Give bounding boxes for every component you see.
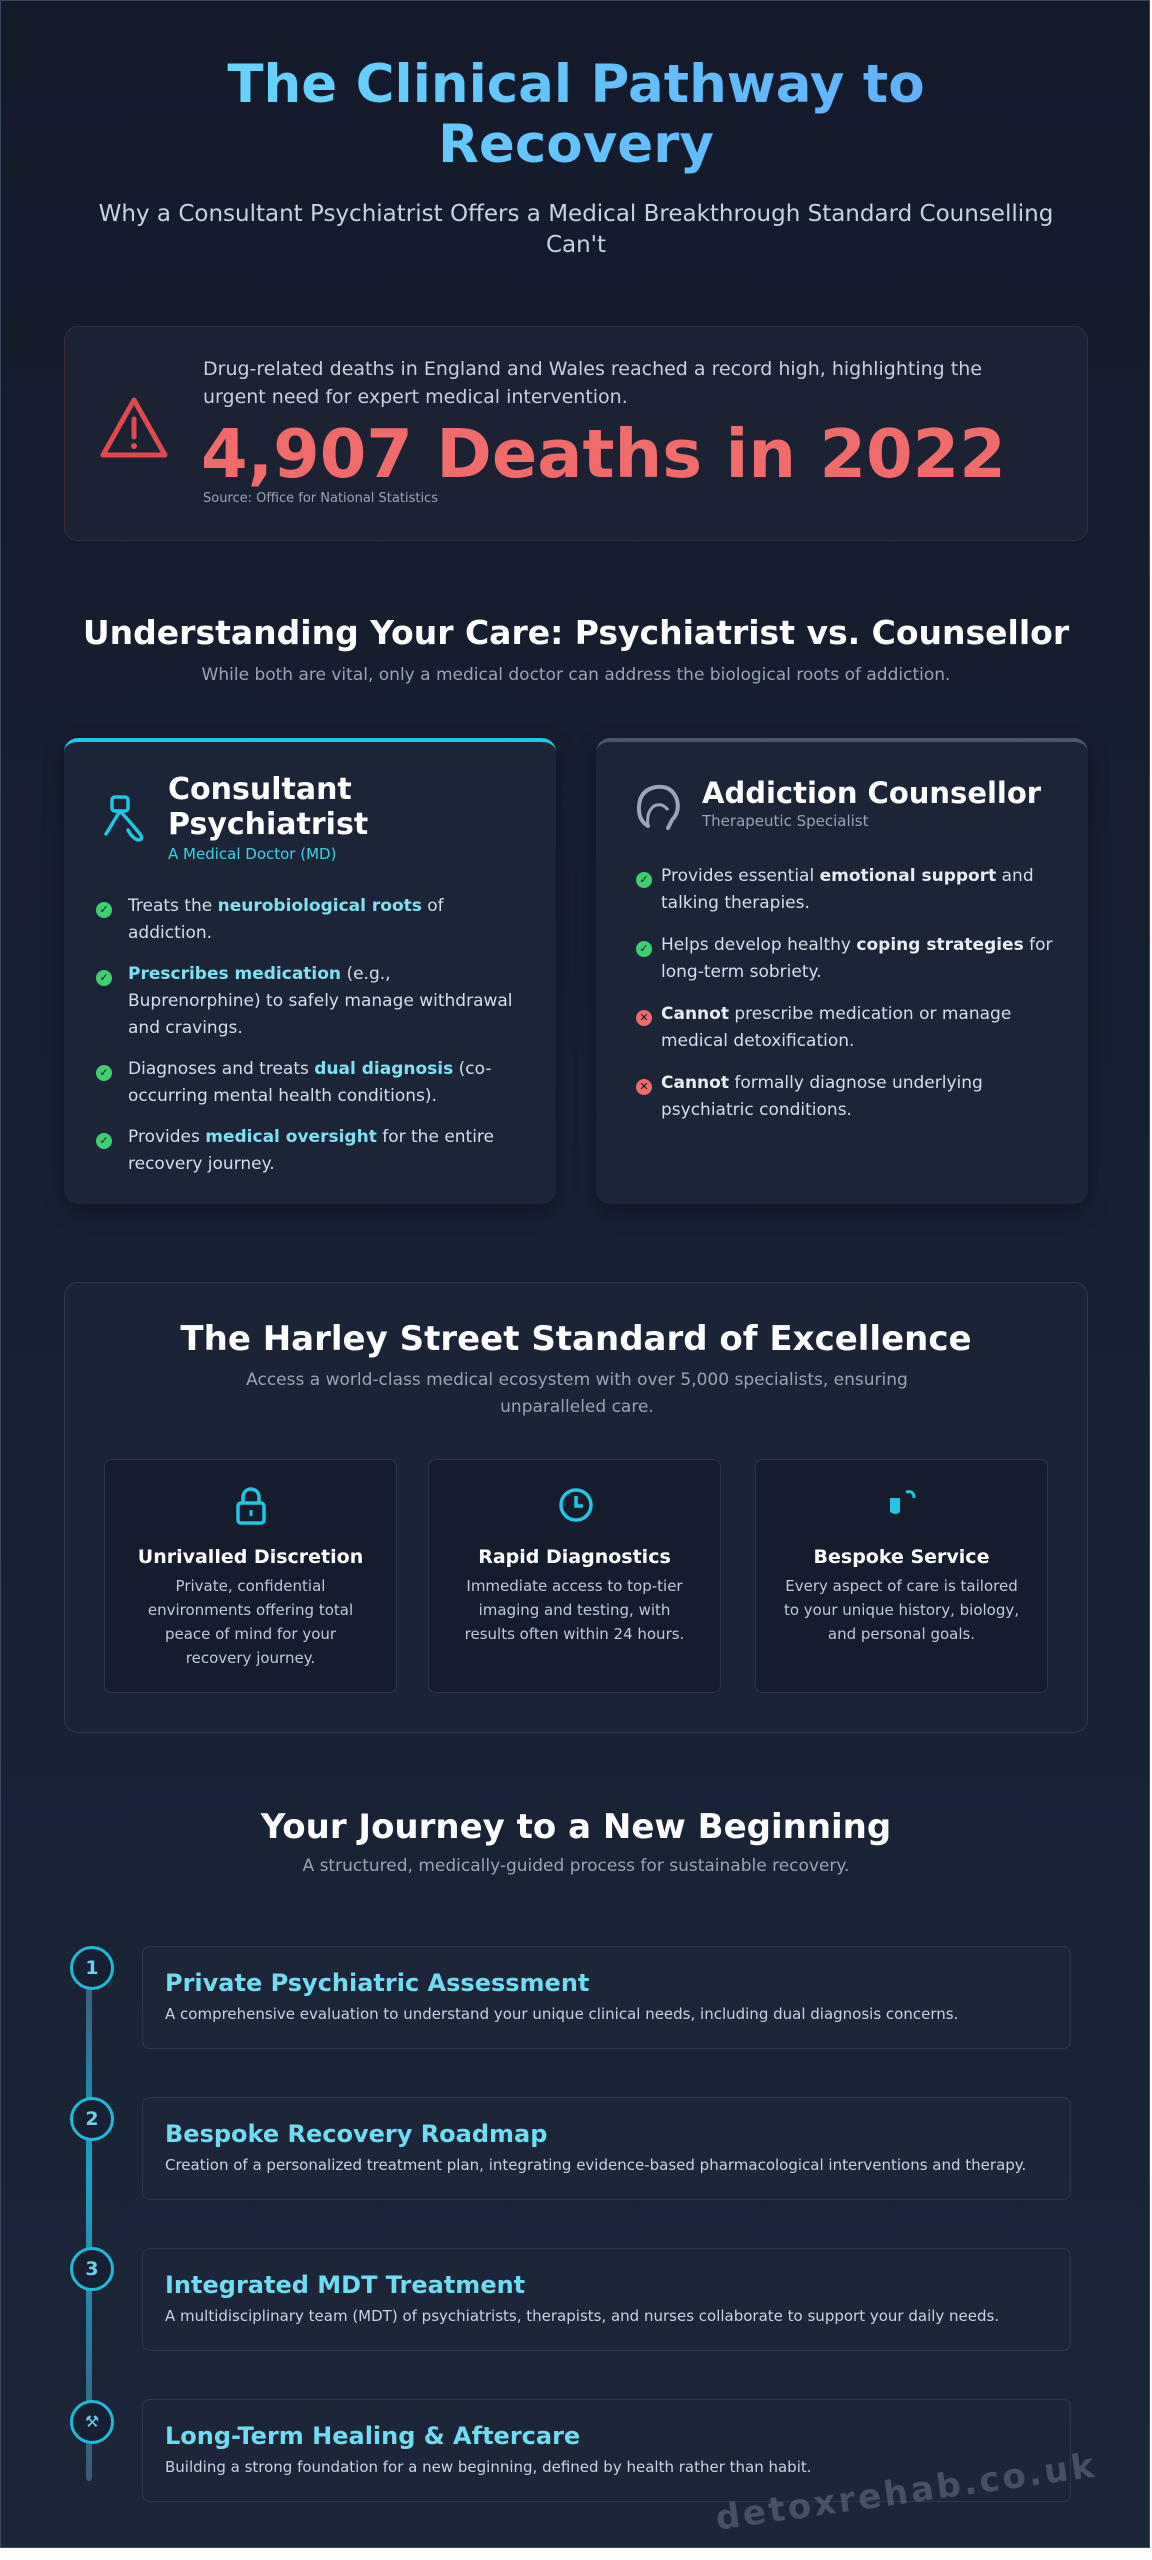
icon: stethoscope (104, 795, 144, 842)
feature: bespoke: Bespoke Service (814, 1546, 989, 1568)
heading: journey: Your Journey to a New Beginning (261, 1807, 891, 1847)
list item 1 (96, 896, 444, 943)
source: Source: Office for National Statistics (203, 491, 438, 506)
subheading: comparison: While both are vital, only a medical doctor can address the biological roots of addiction. (202, 665, 950, 685)
panel: addiction counsellor (596, 738, 1088, 1204)
step marker 4: icon (70, 2400, 114, 2444)
card title: Consultant (168, 772, 352, 807)
panel: consultant psychiatrist: Treats the neurobiological roots of addiction. (128, 896, 444, 943)
watermark: detoxrehab.co.uk (713, 2445, 1099, 2539)
panel: consultant psychiatrist: ✓ (99, 971, 109, 984)
panel: consultant psychiatrist: Diagnoses and treats dual diagnosis (co-occurring mental health conditions). (128, 1059, 491, 1106)
card title: Psychiatrist (168, 807, 368, 842)
text: description: Drug-related deaths in England and Wales reached a record high, highlighting the urgent need for expert medical intervention. (203, 358, 982, 408)
panel: consultant psychiatrist: ✓ (99, 903, 109, 916)
card title (168, 772, 368, 842)
step 3: A multidisciplinary team (MDT) of psychiatrists, therapists, and nurses collaborate to support your daily needs. (165, 2307, 999, 2325)
list item 1 (636, 866, 1034, 913)
list item 2 (96, 964, 513, 1038)
title: The Clinical Pathway to (227, 54, 925, 115)
feature: discretion (104, 1459, 397, 1693)
step 1: Private Psychiatric Assessment (165, 1969, 589, 1997)
step 2: Creation of a personalized treatment plan, integrating evidence-based pharmacological interventions and therapy. (165, 2156, 1026, 2174)
big number: 4,907 Deaths in 2022 (201, 415, 1006, 493)
panel: addiction counsellor: ✓ (639, 942, 649, 955)
subheading: Access a world-class medical ecosystem with over 5,000 specialists, ensuring unparalleled care. (246, 1370, 908, 1417)
panel: consultant psychiatrist: Prescribes medication (e.g., Buprenorphine) to safely manage withdrawal and cravings. (128, 964, 513, 1038)
feature: discretion: Unrivalled Discretion (138, 1546, 363, 1568)
subheading: journey: A structured, medically-guided process for sustainable recovery. (303, 1856, 849, 1876)
feature: diagnostics (428, 1459, 721, 1693)
panel: addiction counsellor: Helps develop healthy coping strategies for long-term sobriety. (661, 935, 1053, 982)
icon: clock (559, 1488, 593, 1522)
list item 2 (636, 935, 1053, 982)
step 1: A comprehensive evaluation to understand your unique clinical needs, including dual diagnosis concerns. (165, 2005, 958, 2023)
heading: The Harley Street Standard of Excellence (180, 1319, 972, 1359)
panel: addiction counsellor: Provides essential emotional support and talking therapies. (661, 866, 1034, 913)
list item 3 (96, 1059, 491, 1106)
step 4 (142, 2399, 1071, 2502)
title: Recovery (438, 114, 714, 175)
panel: addiction counsellor: Cannot prescribe medication or manage medical detoxification. (661, 1004, 1011, 1051)
icon: head (636, 784, 680, 830)
panel: addiction counsellor: ✕ (639, 1011, 649, 1024)
list item 4 (636, 1073, 983, 1120)
step 2: Bespoke Recovery Roadmap (165, 2120, 547, 2148)
feature: bespoke (755, 1459, 1048, 1693)
feature: bespoke: and personal goals. (828, 1625, 975, 1643)
card subtitle: Therapeutic Specialist (702, 812, 868, 830)
panel: addiction counsellor: ✕ (639, 1080, 649, 1093)
step marker 2 (70, 2097, 114, 2141)
list item 3 (636, 1004, 1011, 1051)
card title: Addiction Counsellor (702, 776, 1041, 810)
feature: diagnostics: Immediate access to top-tier (466, 1577, 683, 1595)
feature: bespoke: Every aspect of care is tailored (785, 1577, 1018, 1595)
panel: consultant psychiatrist: ✓ (99, 1134, 109, 1147)
feature: discretion: Private, confidential (176, 1577, 325, 1595)
step 3: Integrated MDT Treatment (165, 2271, 525, 2299)
step 4: Long-Term Healing & Aftercare (165, 2422, 580, 2450)
icon: hand (890, 1490, 916, 1514)
panel: consultant psychiatrist (64, 738, 556, 1204)
icon: lock (236, 1487, 266, 1525)
panel: addiction counsellor: Cannot formally diagnose underlying psychiatric conditions. (661, 1073, 983, 1120)
feature: diagnostics: imaging and testing, with (479, 1601, 670, 1619)
step 3 (142, 2248, 1071, 2351)
feature: diagnostics: Rapid Diagnostics (478, 1546, 671, 1568)
feature: discretion: environments offering total (148, 1601, 353, 1619)
feature: discretion: peace of mind for your (165, 1625, 336, 1643)
panel: harley street standard (64, 1282, 1088, 1733)
feature: discretion: recovery journey. (186, 1649, 315, 1667)
heading: comparison: Understanding Your Care: Psychiatrist vs. Counsellor (83, 613, 1069, 652)
panel: consultant psychiatrist: Provides medical oversight for the entire recovery journey. (128, 1127, 494, 1174)
feature: bespoke: to your unique history, biology, (784, 1601, 1019, 1619)
panel: statistic alert (64, 326, 1088, 541)
step 1 (142, 1946, 1071, 2049)
step marker 1: 1 (85, 1957, 99, 1979)
step marker 1 (70, 1946, 114, 1990)
step marker 4: icon: ⚒ (85, 2412, 99, 2431)
step 4: Building a strong foundation for a new beginning, defined by health rather than habit. (165, 2458, 812, 2476)
panel: consultant psychiatrist: ✓ (99, 1066, 109, 1079)
list item 4 (96, 1127, 494, 1174)
step marker 3: 3 (85, 2258, 99, 2280)
subtitle: Why a Consultant Psychiatrist Offers a Medical Breakthrough Standard Counselling Can't (99, 201, 1053, 258)
panel: addiction counsellor: ✓ (639, 873, 649, 886)
timeline line (86, 1968, 92, 2481)
icon: warning triangle (100, 398, 168, 458)
feature: diagnostics: results often within 24 hours. (465, 1625, 684, 1643)
step marker 3 (70, 2247, 114, 2291)
step marker 2: 2 (85, 2108, 99, 2130)
step 2 (142, 2097, 1071, 2200)
title (1, 55, 1151, 175)
card subtitle: A Medical Doctor (MD) (168, 845, 336, 863)
